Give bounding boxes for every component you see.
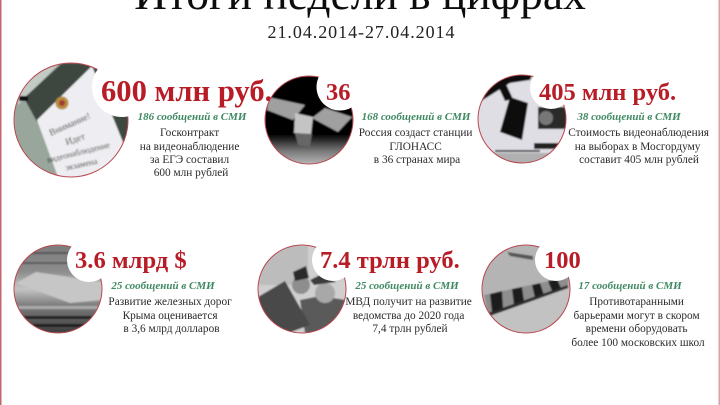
figure: 600 million rubles: 600 млн руб. (101, 74, 272, 108)
figure: 3.6 billion dollars: 3.6 млрд $ (75, 247, 187, 274)
description: времени оборудовать (586, 323, 688, 335)
media mentions: 25 сообщений в СМИ (110, 280, 215, 292)
photo: exam notice sign: Внимание! (48, 112, 92, 139)
description: на выборах в Мосгордуму (575, 141, 701, 153)
description: Противотаранными (589, 296, 684, 308)
description: барьерами могут в скором (574, 310, 700, 322)
photo: exam notice sign: экзамена (65, 156, 98, 172)
description: Стоимость видеонаблюдения (568, 127, 709, 139)
description: Госконтракт (160, 127, 219, 139)
description: ведомства до 2020 года (353, 310, 464, 322)
description: Развитие железных дорог (108, 296, 232, 308)
photo: stadium (14, 244, 102, 334)
description: МВД получит на развитие (345, 296, 472, 308)
panel: Moscow Duma election video surveillance (478, 67, 712, 166)
photo: exam notice sign: видеонаблюдение (46, 139, 111, 165)
description: Крыма оценивается (123, 310, 218, 322)
description: более 100 московских школ (571, 337, 705, 349)
description: 600 млн рублей (154, 167, 228, 179)
figure: 100: 100 (544, 247, 581, 274)
description: составит 405 млн рублей (579, 154, 699, 166)
figure: 405 million rubles: 405 млн руб. (539, 79, 676, 106)
description: ГЛОНАСС (389, 141, 442, 153)
media mentions: 186 сообщений в СМИ (138, 111, 247, 123)
description: 7,4 трлн рублей (372, 323, 448, 335)
panel: Crimea railways (14, 238, 235, 335)
photo: exam notice sign: Идет (64, 132, 87, 148)
right border line (718, 0, 720, 405)
description: в 36 странах мира (374, 154, 460, 166)
photo: striped road barrier (482, 244, 570, 334)
panel: GLONASS stations (264, 76, 472, 166)
media mentions: 17 сообщений в СМИ (578, 280, 682, 292)
description: за ЕГЭ составил (150, 154, 229, 166)
media mentions: 25 сообщений в СМИ (354, 280, 459, 292)
media mentions: 38 сообщений в СМИ (576, 111, 681, 123)
panel: Interior Ministry budget (258, 239, 475, 336)
panel: exam video surveillance contract (14, 57, 272, 179)
left border line (0, 0, 2, 405)
photo: ballot and camera (478, 74, 566, 164)
panel: anti-ram barriers (482, 239, 705, 349)
photo: officers with document (258, 244, 346, 334)
figure: 7.4 trillion rubles: 7.4 трлн руб. (320, 247, 460, 274)
figure: 36: 36 (326, 79, 350, 106)
description: на видеонаблюдение (140, 141, 239, 153)
description: Россия создаст станции (359, 127, 472, 139)
description: в 3,6 млрд долларов (123, 323, 220, 335)
date range: 21.04.2014-27.04.2014 (268, 22, 455, 42)
photo: exam notice sign (14, 62, 128, 178)
photo: satellite (264, 76, 354, 164)
media mentions: 168 сообщений в СМИ (362, 111, 471, 123)
